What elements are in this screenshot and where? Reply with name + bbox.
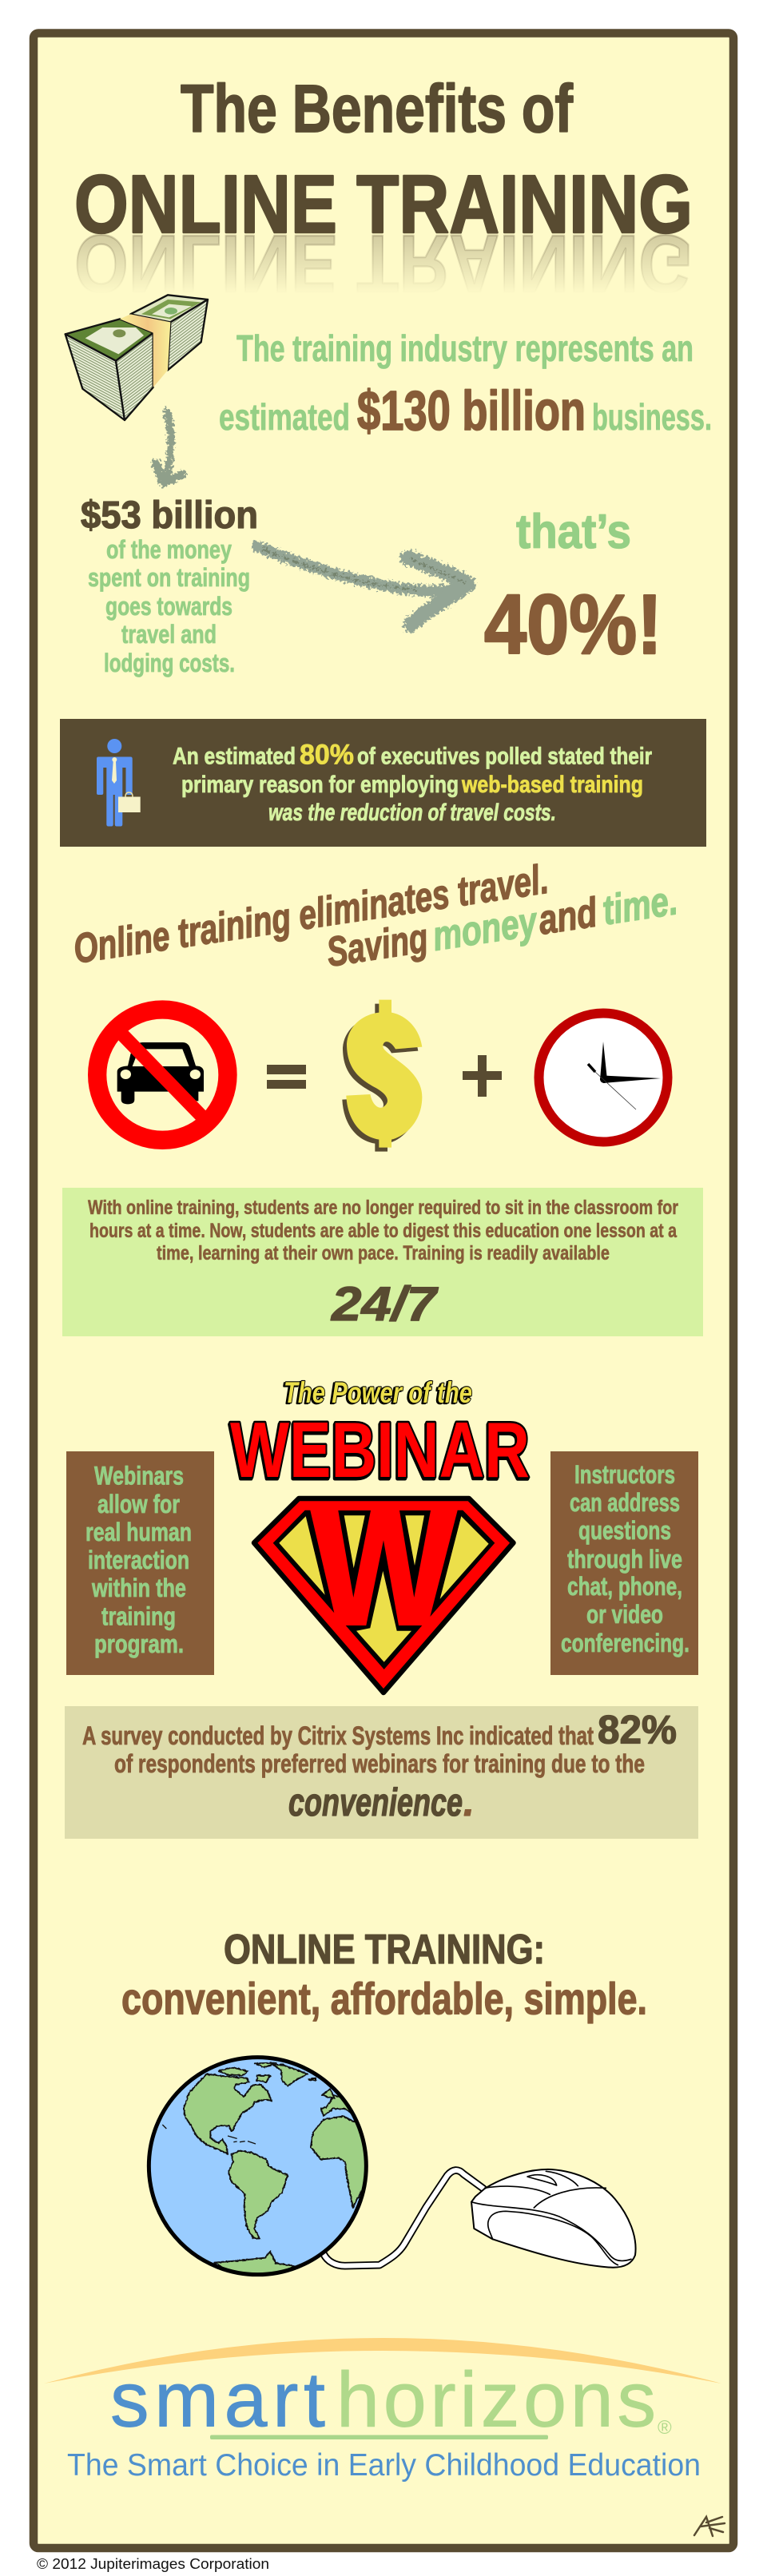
icon: stack of money: [66, 295, 208, 420]
$53 billion text block: spent on training: [88, 563, 250, 592]
panel: 24/7 text box: time, learning at their own pace. Training is readily available: [157, 1242, 610, 1264]
panel: webinars left box: interaction: [88, 1546, 189, 1574]
panel: executives callout: primary reason for employing: [181, 772, 459, 798]
panel: instructors right box: chat, phone,: [567, 1572, 682, 1601]
arrow: small furry arrow down: [156, 412, 182, 482]
closing heading: [121, 1927, 647, 2024]
industry statement: [219, 327, 712, 442]
heading: the power of the webinar: WEBINAR: [230, 1406, 530, 1494]
icon: businessman with briefcase: [97, 739, 141, 826]
panel: instructors right box: through live: [567, 1545, 682, 1574]
panel: webinars left box: Webinars: [94, 1462, 184, 1490]
logo: smart horizons: smart: [110, 2356, 325, 2443]
panel: webinars left box: allow for: [97, 1490, 180, 1518]
heading: the power of the webinar: [230, 1376, 530, 1494]
$53 billion text block: of the money: [106, 535, 232, 564]
panel: webinars left box: real human: [85, 1518, 192, 1546]
logo arc: [44, 2338, 721, 2383]
title: The Benefits of: [181, 71, 574, 146]
icon: clock: [538, 1013, 668, 1142]
panel: webinars left box: within the: [91, 1574, 186, 1602]
title: [74, 71, 693, 250]
panel: instructors right box: or video: [586, 1600, 663, 1629]
panel: webinars left box: program.: [94, 1629, 184, 1658]
panel: webinars left box: [66, 1451, 214, 1675]
slanted heading: travel: Online training eliminates travel.: [70, 856, 551, 973]
panel: executives callout: web-based training: [461, 772, 643, 798]
that's 40%: that’s: [516, 505, 631, 558]
$53 billion text block: lodging costs.: [104, 649, 235, 677]
$53 billion text block: travel and: [121, 620, 217, 649]
panel: executives callout: of executives polled stated their: [357, 743, 652, 770]
icon: computer mouse: [471, 2169, 636, 2268]
panel: instructors right box: can address: [570, 1488, 680, 1517]
icon: dollar sign: [342, 1000, 422, 1152]
panel: 24/7 text box: 24/7: [331, 1277, 439, 1331]
slanted heading: travel: Saving: [324, 915, 431, 976]
heading: the power of the webinar: The Power of the: [284, 1376, 472, 1409]
logo: smart horizons: [110, 2356, 672, 2443]
that's 40%: 40%!: [484, 578, 662, 672]
panel: executives callout: [60, 719, 706, 847]
panel: citrix survey box: 82%: [598, 1708, 677, 1752]
panel: citrix survey box: .: [463, 1781, 475, 1824]
logo: smart horizons: horizons: [336, 2356, 656, 2443]
equals sign: [267, 1065, 306, 1089]
artist signature: [694, 2517, 725, 2536]
panel: instructors right box: questions: [578, 1516, 671, 1545]
panel: instructors right box: [550, 1451, 698, 1675]
icon: globe: [149, 2057, 369, 2279]
panel: instructors right box: conferencing.: [561, 1629, 690, 1657]
panel: citrix survey box: A survey conducted by Citrix Systems Inc indicated that: [82, 1721, 594, 1750]
panel: citrix survey box: convenience: [288, 1781, 463, 1824]
plus sign: [463, 1055, 502, 1097]
icon: superhero W shield: [254, 1498, 513, 1693]
$53 billion text block: $53 billion: [81, 494, 258, 537]
panel: executives callout: was the reduction of travel costs.: [268, 800, 556, 826]
panel: 24/7 text box: [62, 1188, 703, 1336]
slanted heading: travel: time.: [599, 877, 681, 935]
industry statement: business.: [592, 396, 712, 438]
icon: mouse cord: [324, 2170, 483, 2266]
industry statement: $130 billion: [357, 379, 586, 442]
arrow: large furry arrow right: [257, 546, 468, 625]
$53 billion text block: [81, 494, 258, 677]
$53 billion text block: goes towards: [105, 592, 232, 621]
panel: citrix survey box: [65, 1706, 698, 1839]
icon: no car sign: [97, 1010, 228, 1140]
closing heading: convenient, affordable, simple.: [121, 1973, 647, 2024]
closing heading: ONLINE TRAINING:: [224, 1927, 545, 1973]
slanted heading: travel: money: [430, 899, 542, 960]
that's 40%: [484, 505, 662, 672]
industry statement: estimated: [219, 396, 350, 438]
panel: instructors right box: Instructors: [574, 1460, 675, 1489]
slanted heading: travel: and: [535, 889, 601, 944]
panel: executives callout: An estimated: [173, 743, 296, 770]
panel: executives callout: 80%: [300, 740, 354, 770]
copyright: © 2012 Jupiterimages Corporation: [37, 2555, 269, 2572]
tagline: The Smart Choice in Early Childhood Education: [67, 2448, 701, 2483]
panel: webinars left box: training: [101, 1602, 176, 1631]
logo: smart horizons: ®: [658, 2417, 672, 2439]
